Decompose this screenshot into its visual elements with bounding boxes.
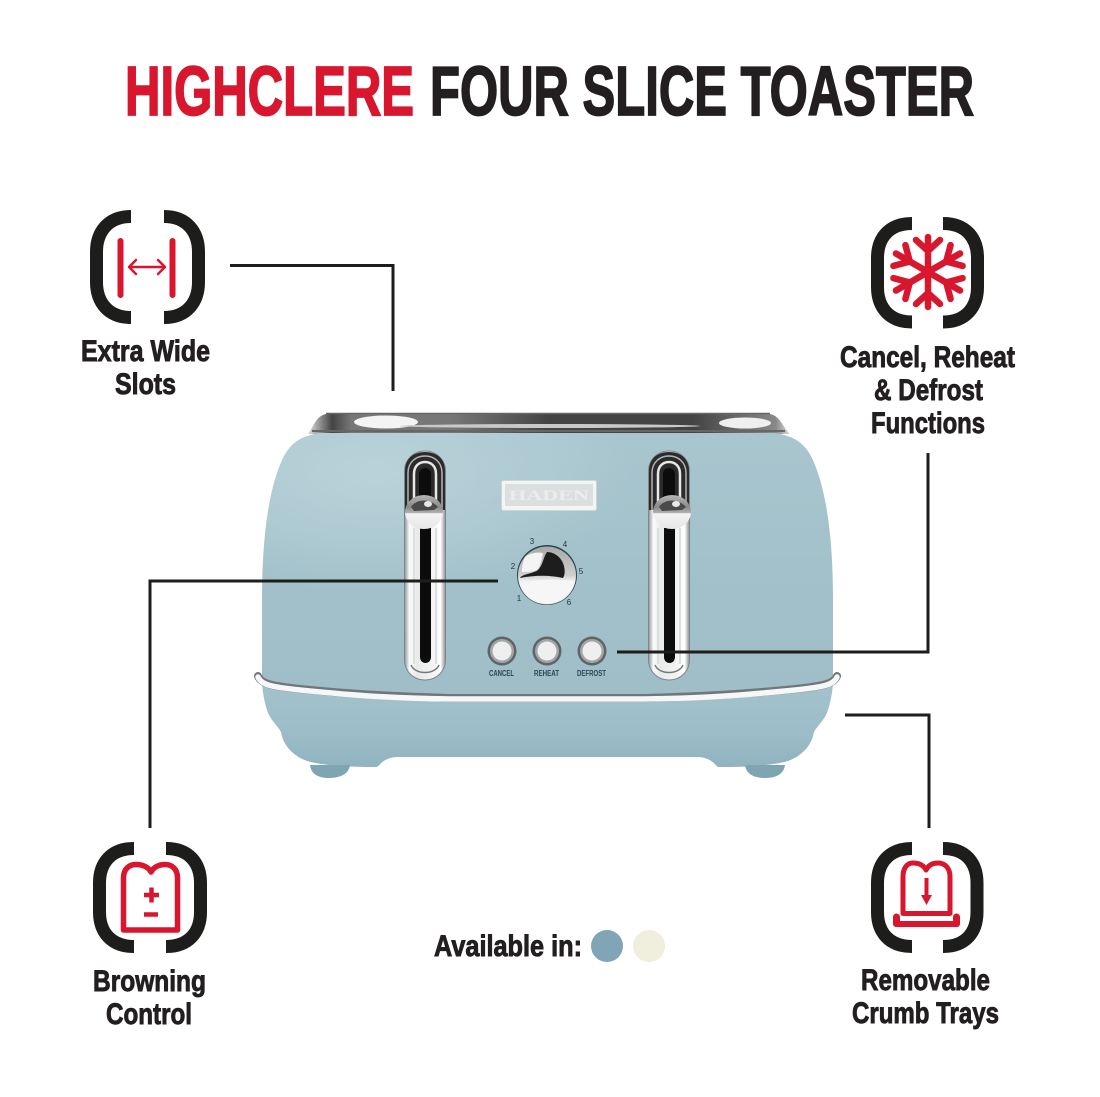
label: removable crumb trays: Crumb Trays bbox=[852, 997, 999, 1030]
connector: browning control bbox=[150, 581, 498, 828]
product image: toaster bbox=[258, 414, 837, 778]
label: extra wide slots: Slots bbox=[115, 368, 176, 401]
control buttons: DEFROST bbox=[577, 669, 606, 678]
browning dial: 3 bbox=[530, 537, 535, 546]
icon: extra wide slots bbox=[96, 216, 198, 318]
title: HIGHCLERE bbox=[125, 52, 414, 130]
left lever knob bbox=[405, 495, 443, 529]
control buttons: CANCEL bbox=[489, 669, 514, 678]
brand badge bbox=[502, 480, 596, 510]
label: cancel reheat defrost: Cancel, Reheat bbox=[840, 341, 1015, 374]
title bbox=[125, 52, 974, 130]
browning dial: 1 bbox=[517, 594, 522, 603]
connector: defrost functions bbox=[617, 453, 928, 652]
control buttons bbox=[488, 636, 606, 678]
label: browning control: Control bbox=[106, 998, 192, 1031]
top chrome band bbox=[308, 414, 790, 434]
label: cancel reheat defrost bbox=[840, 341, 1015, 440]
browning dial: 6 bbox=[567, 598, 572, 607]
chrome ring bbox=[258, 676, 837, 699]
browning dial: 2 bbox=[511, 562, 516, 571]
body highlight bbox=[262, 433, 833, 698]
label: removable crumb trays: Removable bbox=[861, 964, 990, 997]
browning dial: 4 bbox=[563, 540, 568, 549]
browning dial: 5 bbox=[579, 567, 584, 576]
icon: snowflake bbox=[878, 224, 978, 322]
brand badge: HADEN bbox=[509, 488, 589, 504]
available colours: Available in: bbox=[434, 930, 582, 963]
connector: crumb trays bbox=[845, 715, 929, 828]
right lever knob bbox=[653, 495, 691, 529]
label: browning control: Browning bbox=[93, 965, 206, 998]
right slot lever bbox=[648, 451, 691, 680]
icon: removable crumb trays bbox=[878, 848, 977, 946]
label: cancel reheat defrost: Functions bbox=[871, 407, 985, 440]
label: browning control bbox=[93, 965, 206, 1031]
label: extra wide slots bbox=[81, 335, 210, 401]
left slot lever bbox=[404, 451, 446, 680]
upper body bbox=[262, 433, 833, 698]
control buttons: REHEAT bbox=[534, 669, 559, 678]
browning dial bbox=[511, 537, 584, 607]
lower body and base bbox=[262, 684, 833, 767]
label: cancel reheat defrost: & Defrost bbox=[874, 374, 983, 407]
feet bbox=[310, 765, 785, 778]
connector: extra wide slots bbox=[230, 266, 393, 391]
label: removable crumb trays bbox=[852, 964, 999, 1030]
label: extra wide slots: Extra Wide bbox=[81, 335, 210, 368]
icon: browning control bbox=[100, 848, 200, 946]
